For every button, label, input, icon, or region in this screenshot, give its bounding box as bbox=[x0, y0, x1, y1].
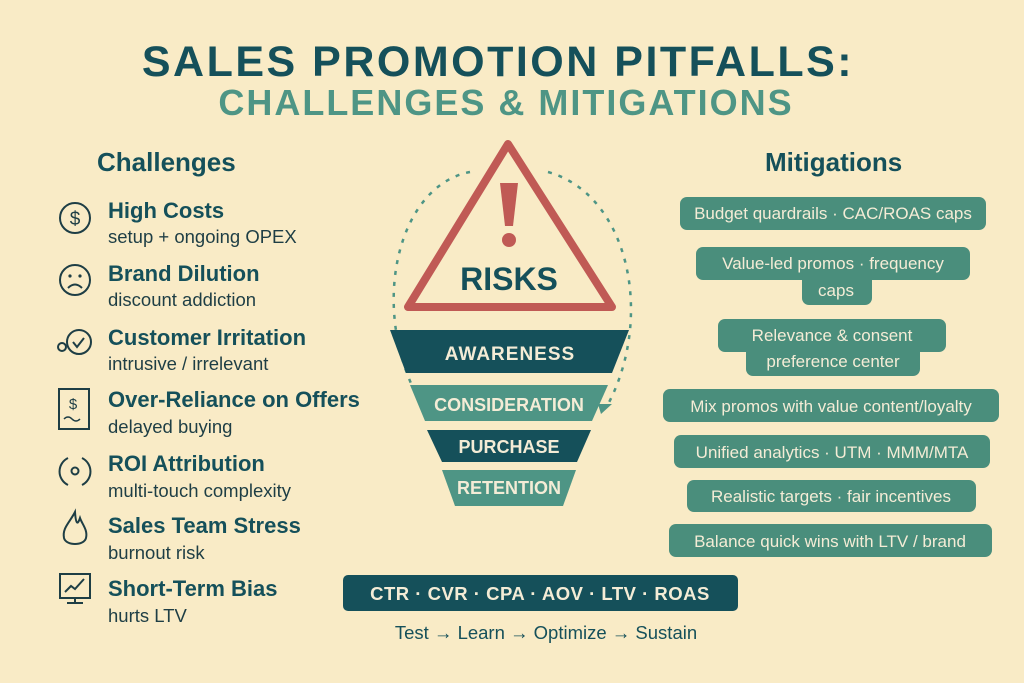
challenge: customer irritation: Customer Irritation bbox=[108, 325, 306, 350]
challenge: short-term bias: Short-Term Bias bbox=[108, 576, 278, 601]
challenge: high costs bbox=[60, 198, 297, 247]
icon: risks warning triangle bbox=[408, 144, 612, 307]
mitigation 6: Realistic targets · fair incentives bbox=[711, 487, 951, 506]
funnel: purchase bbox=[427, 430, 591, 462]
mitigation 3: preference center bbox=[766, 352, 900, 371]
metrics bar bbox=[343, 575, 738, 611]
mitigation 2: caps bbox=[818, 281, 854, 300]
mitigation 2: Value-led promos · frequency bbox=[722, 254, 944, 273]
challenge: customer irritation: intrusive / irrelevant bbox=[108, 353, 268, 374]
challenge: over-reliance: delayed buying bbox=[108, 416, 232, 437]
challenge: over-reliance: $ bbox=[69, 396, 78, 413]
funnel: consideration: CONSIDERATION bbox=[434, 395, 584, 415]
funnel: retention bbox=[442, 470, 576, 506]
challenge: high costs: High Costs bbox=[108, 198, 224, 223]
challenge: high costs: $ bbox=[70, 209, 81, 230]
heading: Mitigations: Mitigations bbox=[765, 147, 902, 177]
challenge: brand dilution: Brand Dilution bbox=[108, 261, 260, 286]
challenge: ROI attribution: multi-touch complexity bbox=[108, 480, 292, 501]
funnel bbox=[390, 330, 629, 506]
funnel: retention: RETENTION bbox=[457, 478, 561, 498]
heading: Challenges: Challenges bbox=[97, 147, 236, 177]
challenge: sales team stress: burnout risk bbox=[108, 542, 205, 563]
challenge: brand dilution: discount addiction bbox=[108, 289, 256, 310]
mitigation 5: Unified analytics · UTM · MMM/MTA bbox=[696, 443, 969, 462]
mitigation 7 bbox=[669, 524, 992, 557]
challenge: over-reliance: Over-Reliance on Offers bbox=[108, 387, 360, 412]
challenge: high costs: setup + ongoing OPEX bbox=[108, 226, 297, 247]
mitigation 3: Relevance & consent bbox=[752, 326, 913, 345]
funnel: awareness bbox=[390, 330, 629, 373]
challenge: over-reliance bbox=[59, 387, 360, 437]
challenge: sales team stress bbox=[64, 512, 301, 563]
mitigation 5 bbox=[674, 435, 990, 468]
mitigation 4 bbox=[663, 389, 999, 422]
icon: risks warning triangle: RISKS bbox=[460, 261, 558, 297]
challenge: short-term bias: hurts LTV bbox=[108, 605, 187, 626]
metrics bar: CTR · CVR · CPA · AOV · LTV · ROAS bbox=[370, 583, 710, 604]
title bbox=[142, 38, 854, 123]
funnel: consideration bbox=[410, 385, 608, 421]
challenge: short-term bias bbox=[60, 574, 278, 626]
mitigation 4: Mix promos with value content/loyalty bbox=[690, 397, 972, 416]
mitigation 1 bbox=[680, 197, 986, 230]
panel: challenges list bbox=[58, 198, 360, 626]
challenge: sales team stress: Sales Team Stress bbox=[108, 513, 301, 538]
challenge: ROI attribution: ROI Attribution bbox=[108, 451, 265, 476]
title: SALES PROMOTION PITFALLS: bbox=[142, 38, 854, 86]
arrowhead bbox=[598, 404, 612, 414]
title: CHALLENGES & MITIGATIONS bbox=[218, 82, 794, 123]
challenge: customer irritation bbox=[58, 325, 306, 374]
mitigation 6 bbox=[687, 480, 976, 512]
funnel: awareness: AWARENESS bbox=[445, 344, 575, 365]
mitigation 2 bbox=[696, 247, 970, 305]
mitigation 1: Budget quardrails · CAC/ROAS caps bbox=[694, 204, 972, 223]
cycle text: Test → Learn → Optimize → Sustain bbox=[395, 622, 697, 643]
dashed cycle arrows bbox=[394, 172, 631, 408]
challenge: brand dilution bbox=[60, 261, 260, 310]
mitigation 3 bbox=[718, 319, 946, 376]
mitigation 7: Balance quick wins with LTV / brand bbox=[694, 532, 966, 551]
panel: mitigations bbox=[663, 197, 999, 557]
challenge: ROI attribution bbox=[60, 451, 292, 501]
funnel: purchase: PURCHASE bbox=[458, 437, 560, 457]
